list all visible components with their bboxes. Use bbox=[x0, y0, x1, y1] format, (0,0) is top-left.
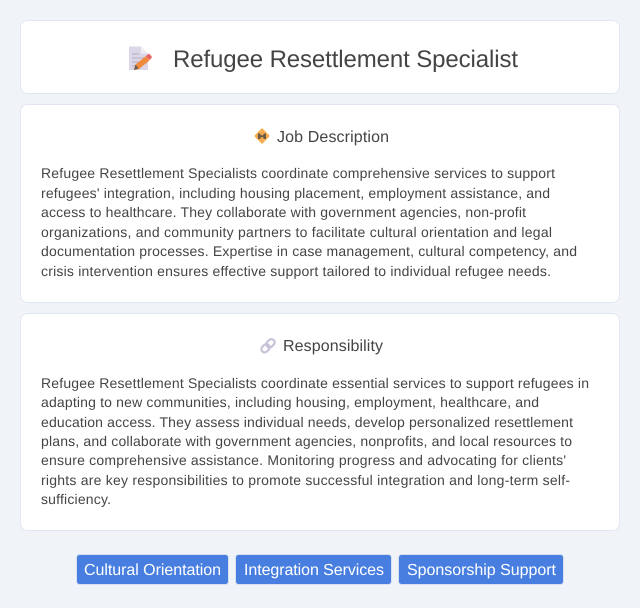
title: Refugee Resettlement Specialist bbox=[173, 46, 518, 73]
heading: responsibility: Responsibility bbox=[283, 338, 383, 355]
text block: responsibility: sufficiency. bbox=[41, 491, 111, 507]
text block: job description: organizations, and community partners to facilitate cultural orientation and legal bbox=[41, 224, 552, 240]
text block: job description: Refugee Resettlement Specialists coordinate comprehensive services to support bbox=[41, 165, 555, 181]
icon: chain link bbox=[260, 338, 276, 354]
tag: cultural orientation: Cultural Orientation bbox=[84, 562, 221, 579]
heading: job description: Job Description bbox=[277, 129, 389, 146]
tag: cultural orientation bbox=[76, 554, 228, 584]
text block: responsibility: rights are key responsibilities to promote successful integration and long-term self- bbox=[41, 472, 570, 488]
text block: responsibility: ensure comprehensive assistance. Monitoring progress and advocating for clients' bbox=[41, 452, 566, 468]
tag: integration services: Integration Services bbox=[244, 562, 384, 579]
icon: document with pencil bbox=[129, 46, 152, 70]
text block: responsibility: Refugee Resettlement Specialists coordinate essential services to support refugees in bbox=[41, 375, 589, 391]
tag: sponsorship support bbox=[398, 554, 564, 584]
text block: job description: crisis intervention ensures effective support tailored to individual refugee needs. bbox=[41, 263, 551, 279]
icon: diamond sign bbox=[255, 128, 269, 144]
text block: responsibility bbox=[41, 375, 589, 507]
panel: job description bbox=[20, 104, 620, 302]
text block: job description: refugees' integration, including housing placement, employment assistance, and bbox=[41, 185, 550, 201]
text block: job description: access to healthcare. They collaborate with government agencies, non-profit bbox=[41, 204, 526, 220]
text block: job description bbox=[41, 165, 577, 279]
panel: title card bbox=[20, 20, 620, 94]
text block: responsibility: plans, and collaborate with government agencies, nonprofits, and local resources to bbox=[41, 433, 572, 449]
text block: responsibility: adapting to new communities, including housing, employment, healthcare, and bbox=[41, 394, 539, 410]
panel: responsibility bbox=[20, 314, 620, 530]
text block: responsibility: education access. They assess individual needs, develop personalized resettlement bbox=[41, 414, 573, 430]
tag: sponsorship support: Sponsorship Support bbox=[407, 562, 557, 579]
tag: integration services bbox=[236, 554, 392, 584]
text block: job description: documentation processes. Expertise in case management, cultural competency, and bbox=[41, 243, 577, 259]
